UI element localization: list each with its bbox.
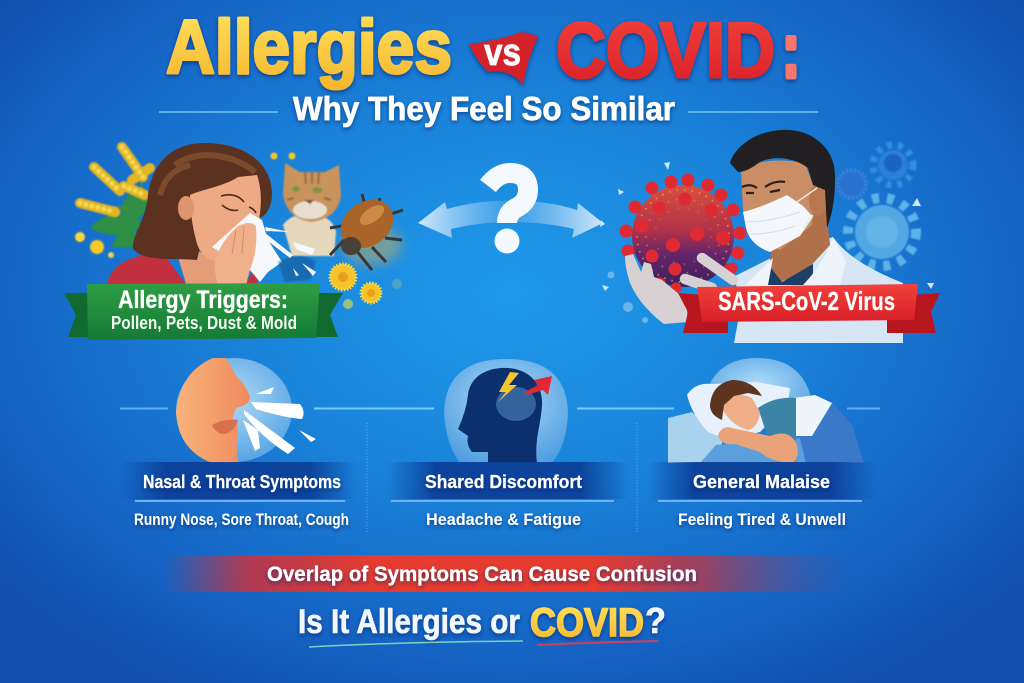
- illustration: allergy triggers: [75, 143, 403, 309]
- column: general malaise: [648, 358, 876, 529]
- label band: Feeling Tired & Unwell: [678, 511, 846, 529]
- connector lines: [120, 408, 880, 410]
- arrow: right: [510, 201, 603, 238]
- title: Allergies: [166, 5, 452, 90]
- column: nasal and throat symptoms: [120, 358, 357, 529]
- label band: Runny Nose, Sore Throat, Cough: [134, 511, 349, 529]
- column dividers: [367, 423, 637, 533]
- icon: head with lightning: [444, 359, 568, 463]
- gloved hands: [625, 254, 733, 324]
- badge: vs: [469, 32, 538, 85]
- label band: Headache & Fatigue: [426, 511, 581, 529]
- dandelion flowers: [330, 264, 402, 309]
- sneeze spray: [264, 227, 316, 282]
- banner: allergy triggers: [64, 283, 343, 340]
- closing question: ?: [645, 600, 666, 641]
- label band: [648, 462, 876, 529]
- subtitle: Why They Feel So Similar: [293, 90, 675, 127]
- callout: overlap of symptoms: [164, 555, 857, 592]
- title: :: [782, 6, 800, 94]
- virus spikes: [626, 182, 740, 290]
- virus spike heads: [620, 174, 746, 294]
- icon: man in bed: [668, 358, 864, 463]
- banner: sars-cov-2 virus: [678, 284, 940, 333]
- label band: [120, 462, 357, 529]
- closing question: Is It Allergies or: [298, 603, 520, 641]
- closing question: COVID: [530, 601, 644, 645]
- doctor: [730, 130, 903, 343]
- cat: [283, 163, 341, 256]
- floating particles: [600, 162, 934, 323]
- callout: overlap of symptoms: Overlap of Symptoms Can Cause Confusion: [267, 562, 697, 586]
- title: COVID: [556, 6, 775, 94]
- icon: question mark with arrows: [418, 173, 603, 254]
- banner: sars-cov-2 virus: SARS-CoV-2 Virus: [718, 286, 895, 316]
- plant: goldenrod and leaves: [75, 147, 296, 258]
- banner: allergy triggers: Allergy Triggers:: [118, 286, 288, 314]
- background viruses: [838, 145, 916, 266]
- column: shared discomfort: [387, 359, 629, 529]
- virus body: [632, 185, 734, 287]
- banner: allergy triggers: Pollen, Pets, Dust & Mold: [111, 313, 297, 333]
- icon: nose and sneeze: [176, 358, 316, 463]
- woman sneezing: [107, 143, 282, 284]
- badge: vs: vs: [484, 32, 521, 74]
- label band: Shared Discomfort: [425, 472, 582, 492]
- dust mite: [330, 190, 403, 270]
- label band: [387, 462, 629, 529]
- closing question: [298, 600, 666, 647]
- label band: General Malaise: [693, 472, 830, 492]
- arrow: left: [418, 201, 510, 238]
- illustration: covid virus and doctor: [600, 130, 934, 343]
- title: [166, 5, 800, 94]
- label band: Nasal & Throat Symptoms: [143, 472, 341, 492]
